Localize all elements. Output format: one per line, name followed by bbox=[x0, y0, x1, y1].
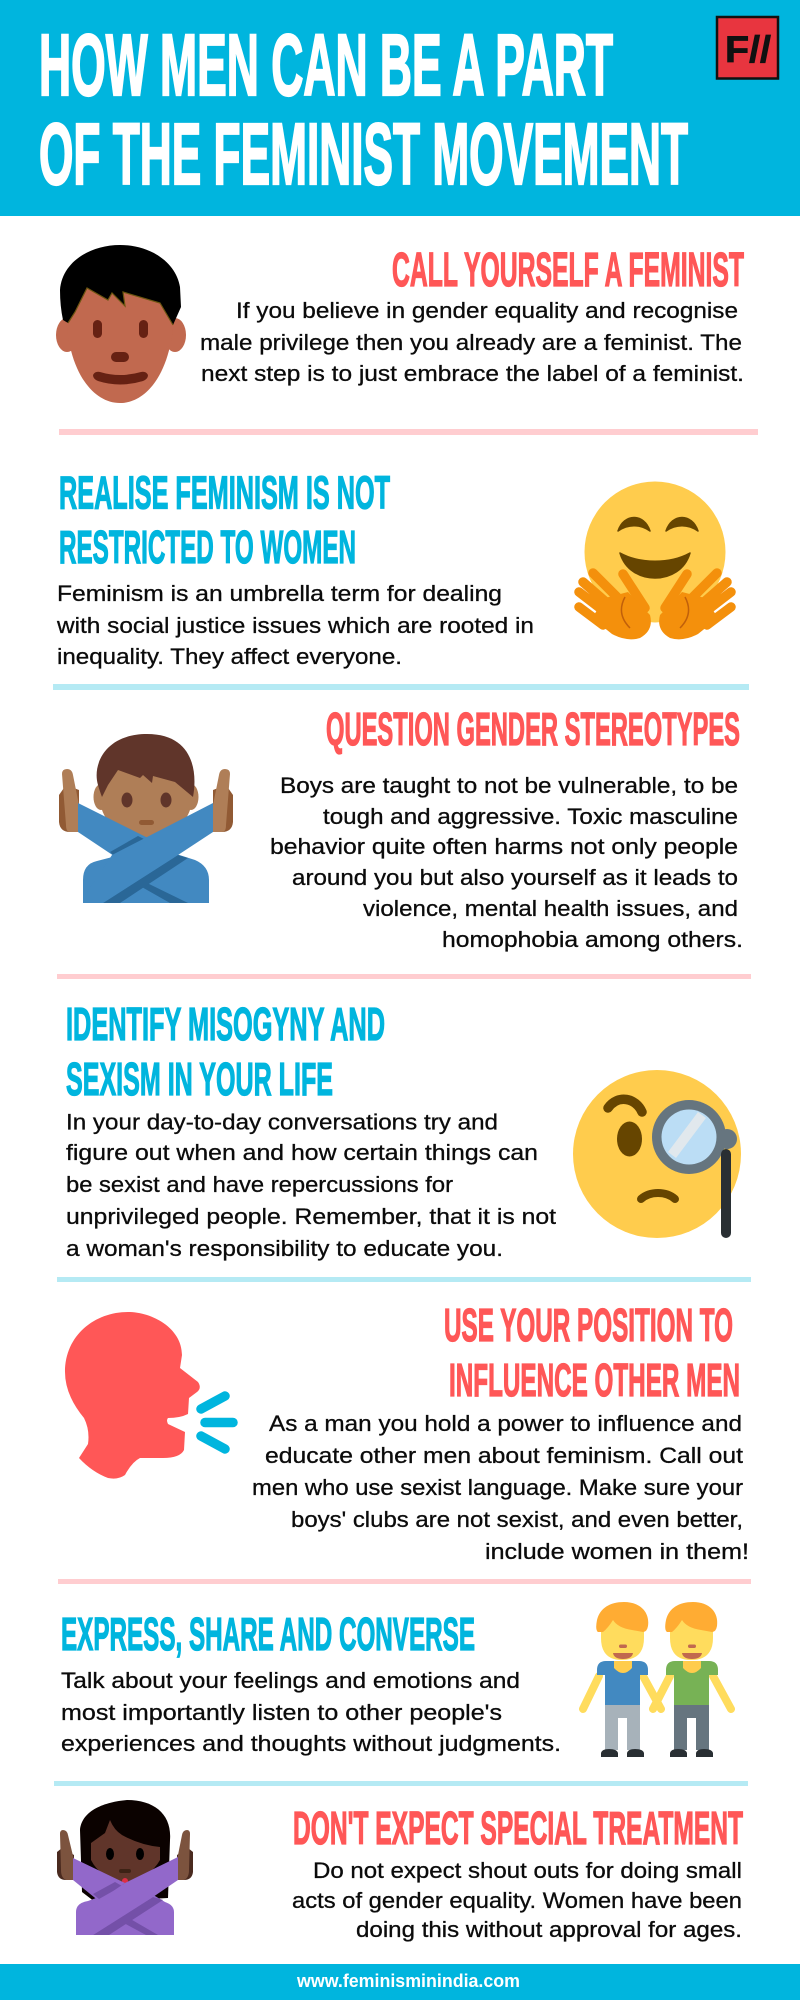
body text: be sexist and have repercussions for bbox=[66, 1172, 453, 1197]
panel: call yourself a feminist bbox=[56, 244, 744, 403]
body text bbox=[292, 1858, 742, 1942]
icon: hugging face bbox=[579, 482, 731, 639]
body text: figure out when and how certain things can bbox=[66, 1140, 538, 1165]
man two bbox=[665, 1602, 718, 1757]
heading bbox=[444, 1299, 740, 1406]
body text: unprivileged people. Remember, that it is not bbox=[66, 1204, 556, 1229]
heading: RESTRICTED TO WOMEN bbox=[59, 521, 356, 573]
body text: experiences and thoughts without judgments. bbox=[61, 1731, 561, 1756]
body text bbox=[270, 773, 743, 952]
icon: man face bbox=[56, 245, 186, 403]
panel: express share converse bbox=[61, 1602, 731, 1757]
body text: Talk about your feelings and emotions and bbox=[61, 1668, 520, 1693]
icon: man gesturing no bbox=[59, 734, 233, 903]
panel: identify misogyny bbox=[66, 998, 741, 1261]
body text bbox=[56, 581, 534, 669]
icon: woman gesturing no bbox=[57, 1800, 193, 1935]
logo bbox=[717, 17, 778, 78]
body text: most importantly listen to other people's bbox=[61, 1700, 502, 1725]
icon: speaking head bbox=[65, 1312, 233, 1479]
heading bbox=[59, 466, 390, 573]
body text: boys' clubs are not sexist, and even better, bbox=[291, 1507, 743, 1532]
heading bbox=[66, 998, 385, 1105]
body text: In your day-to-day conversations try and bbox=[66, 1110, 498, 1134]
body text: with social justice issues which are rooted in bbox=[56, 613, 534, 638]
footer bbox=[0, 1964, 800, 2000]
body text: tough and aggressive. Toxic masculine bbox=[323, 804, 738, 829]
title bbox=[39, 17, 688, 203]
man one bbox=[596, 1602, 648, 1757]
body text: As a man you hold a power to influence and bbox=[269, 1411, 742, 1436]
body text: If you believe in gender equality and recognise bbox=[236, 298, 738, 323]
body text: next step is to just embrace the label of a feminist. bbox=[201, 361, 744, 386]
heading: SEXISM IN YOUR LIFE bbox=[66, 1053, 333, 1105]
body text: violence, mental health issues, and bbox=[363, 896, 738, 921]
heading: REALISE FEMINISM IS NOT bbox=[59, 466, 390, 518]
body text: include women in them! bbox=[485, 1539, 749, 1564]
panel: question gender stereotypes bbox=[59, 703, 743, 952]
panel: realise feminism bbox=[56, 466, 731, 669]
body text: Feminism is an umbrella term for dealing bbox=[57, 581, 502, 606]
website: www.feminisminindia.com bbox=[296, 1971, 520, 1991]
body text bbox=[200, 298, 744, 386]
body text: doing this without approval for ages. bbox=[356, 1917, 742, 1942]
body text bbox=[252, 1411, 749, 1564]
body text: homophobia among others. bbox=[442, 927, 743, 952]
body text: acts of gender equality. Women have been bbox=[292, 1888, 742, 1913]
body text: a woman's responsibility to educate you. bbox=[66, 1236, 503, 1261]
body text: behavior quite often harms not only people bbox=[270, 834, 738, 859]
icon: monocle face bbox=[573, 1070, 741, 1238]
panel: don't expect special treatment bbox=[57, 1800, 743, 1942]
body text bbox=[66, 1110, 556, 1261]
body text: male privilege then you already are a feminist. The bbox=[200, 330, 742, 355]
body text: Do not expect shout outs for doing small bbox=[313, 1858, 742, 1883]
body text bbox=[61, 1668, 561, 1756]
body text: men who use sexist language. Make sure your bbox=[252, 1475, 743, 1500]
body text: educate other men about feminism. Call out bbox=[265, 1443, 743, 1468]
panel: use your position bbox=[65, 1299, 749, 1564]
icon: two men holding hands bbox=[583, 1602, 731, 1757]
body text: Boys are taught to not be vulnerable, to be bbox=[280, 773, 738, 798]
logo: F// bbox=[725, 29, 771, 70]
header banner bbox=[0, 0, 800, 216]
body text: inequality. They affect everyone. bbox=[57, 644, 402, 669]
heading: IDENTIFY MISOGYNY AND bbox=[66, 998, 385, 1050]
body text: around you but also yourself as it leads to bbox=[292, 865, 738, 890]
